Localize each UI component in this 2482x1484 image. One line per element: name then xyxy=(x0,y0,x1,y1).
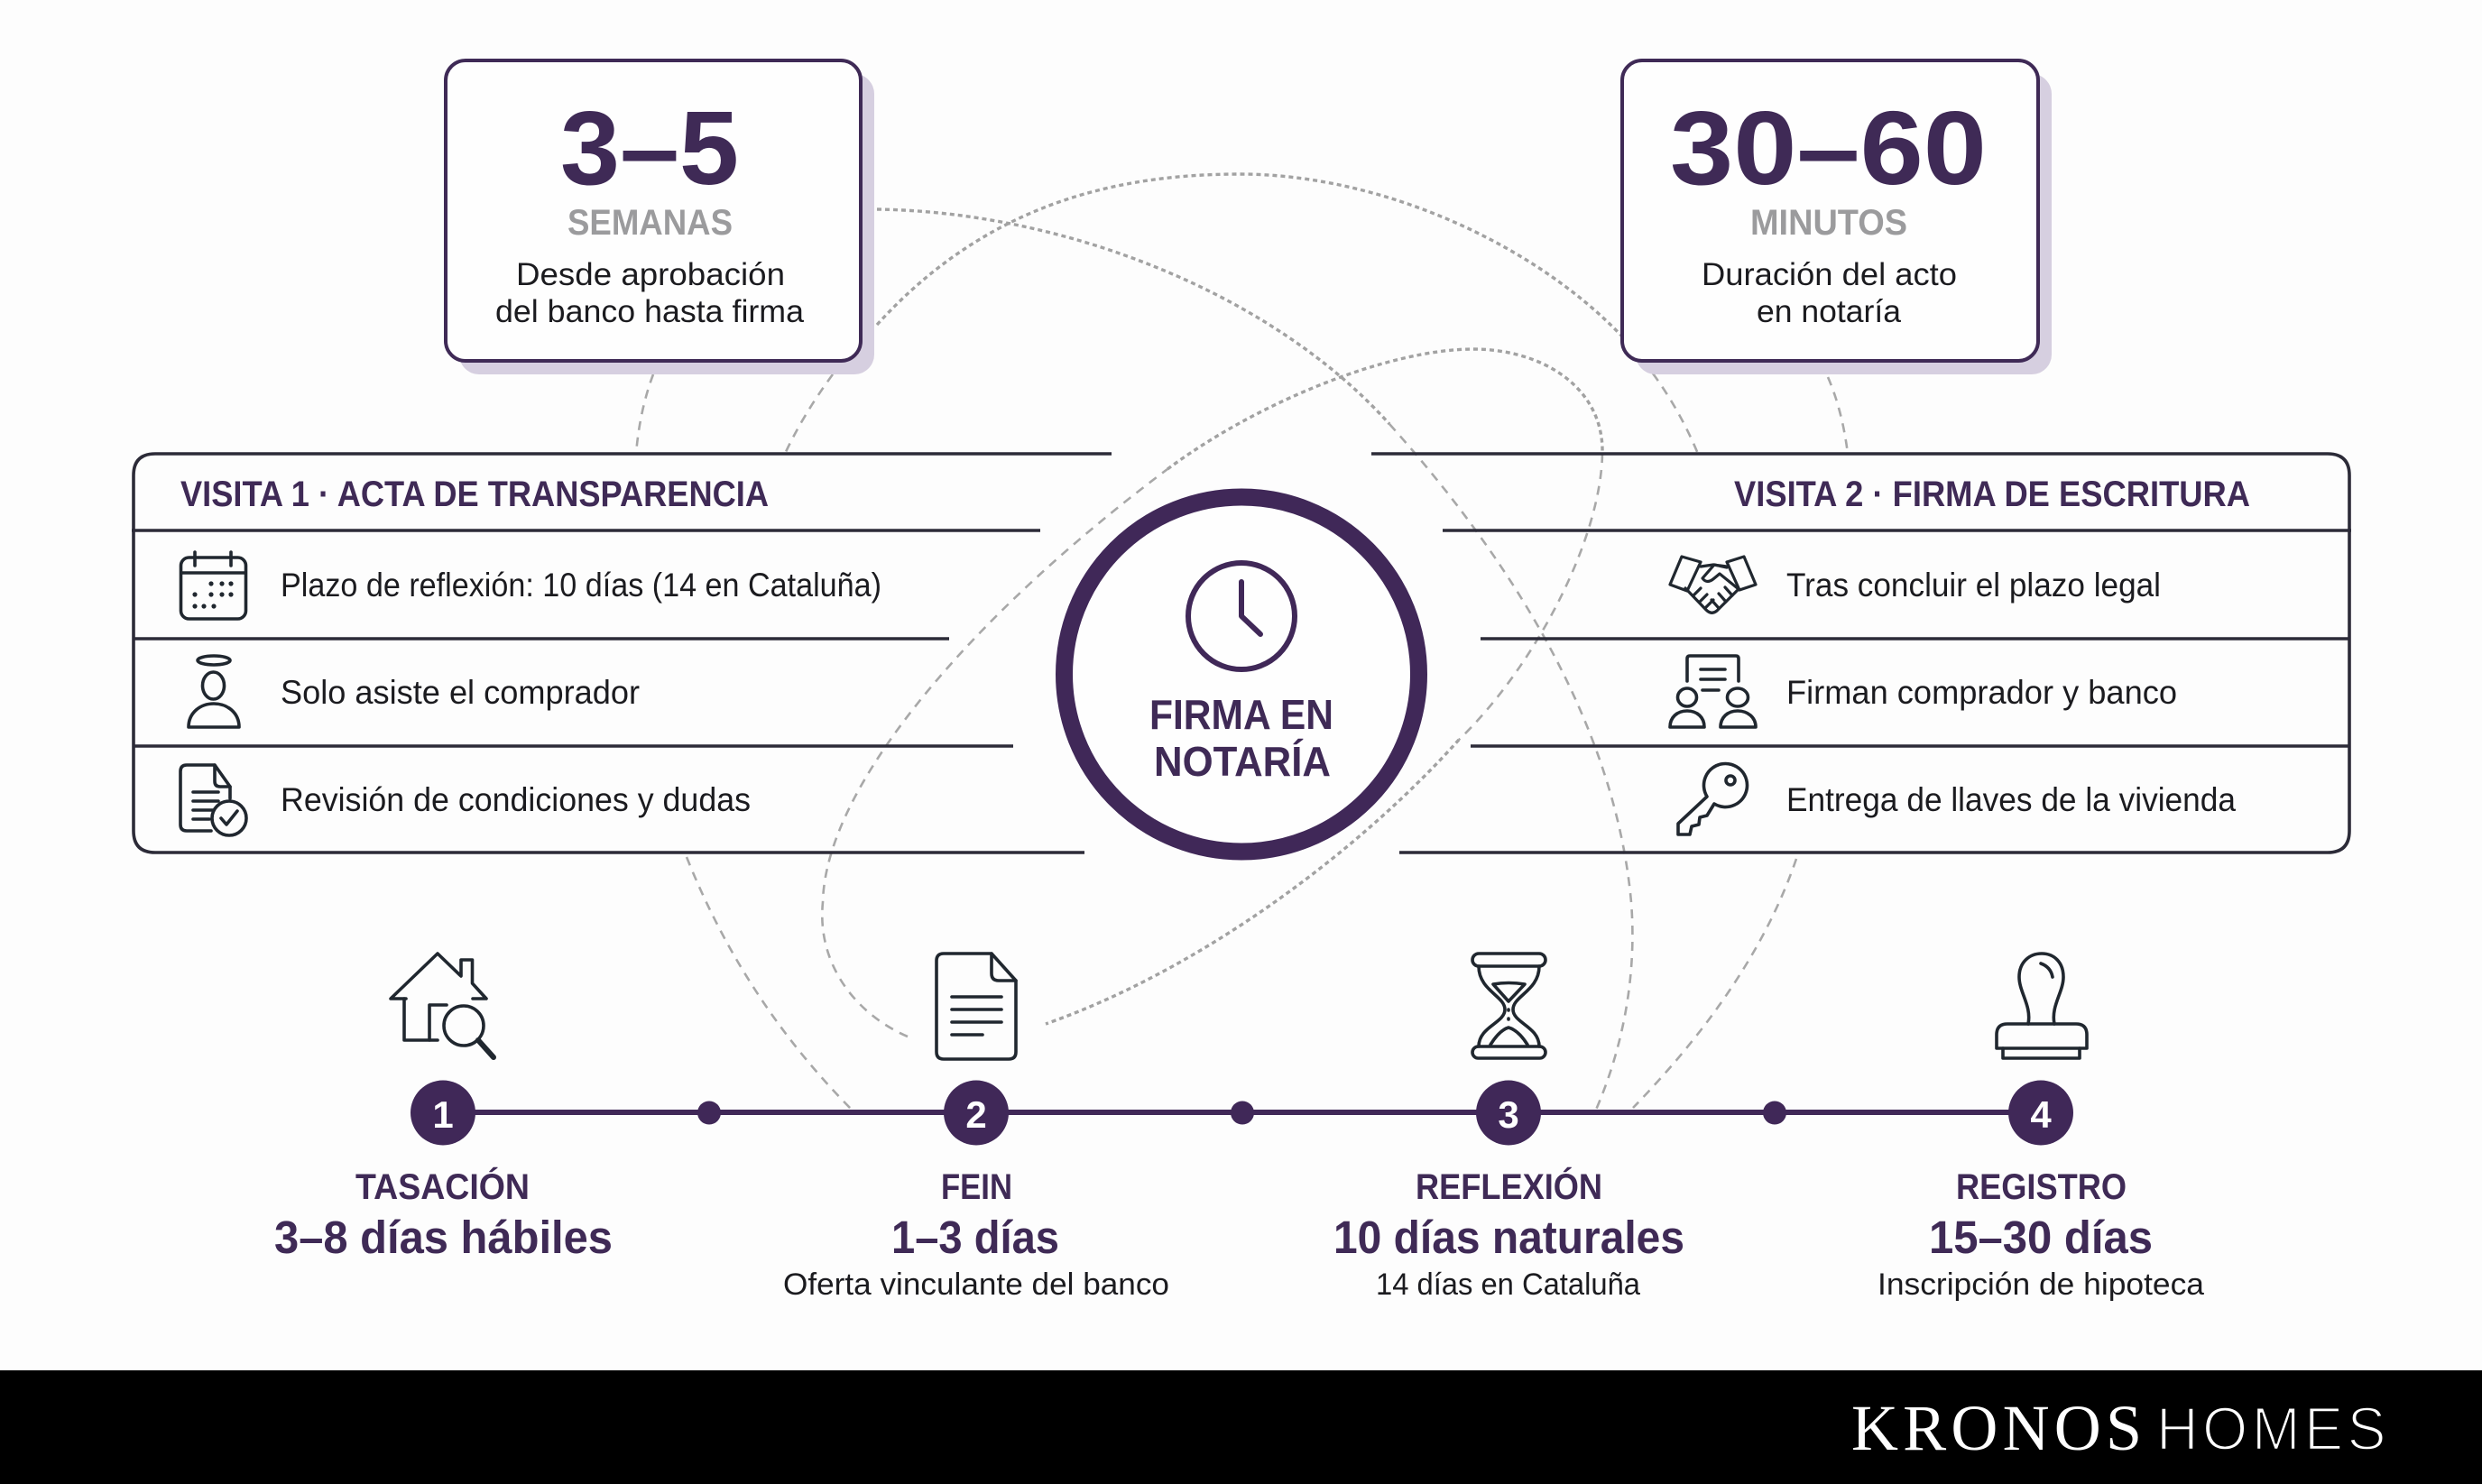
icon: handshake xyxy=(1670,557,1756,613)
big number 3–5: 3–5 xyxy=(560,89,739,207)
step duration: 10 días naturales xyxy=(1333,1212,1684,1263)
stat card: 3–5 semanas xyxy=(446,60,874,374)
icon: house with magnifier xyxy=(391,954,494,1057)
step duration: 15–30 días xyxy=(1929,1212,2153,1263)
unit label: SEMANAS xyxy=(567,203,733,243)
step 2: fein: 2 xyxy=(965,1093,987,1136)
step 4: registro: 4 xyxy=(2030,1093,2052,1136)
card description: Desde aprobación xyxy=(516,257,785,292)
row text: plazo de reflexión: Plazo de reflexión: 10 días (14 en Cataluña) xyxy=(281,567,881,604)
icon: document with check xyxy=(180,765,246,835)
step duration: 3–8 días hábiles xyxy=(274,1212,613,1263)
icon: signers with document xyxy=(1670,656,1756,727)
step label: FEIN xyxy=(941,1167,1012,1207)
footer bar xyxy=(0,1370,2482,1484)
icon: document xyxy=(937,954,1016,1059)
badge title xyxy=(1149,691,1333,785)
icon: hourglass xyxy=(1472,954,1545,1058)
card description: Duración del acto xyxy=(1702,257,1957,292)
logo: kronoshomes: KRONOS xyxy=(1851,1392,2142,1464)
timeline xyxy=(274,954,2204,1302)
panel: visita 2 xyxy=(1371,454,2351,853)
step 2: fein xyxy=(783,954,1169,1302)
big number 30–60: 30–60 xyxy=(1670,89,1987,207)
logo: kronoshomes xyxy=(1851,1392,2386,1464)
icon: key xyxy=(1678,764,1747,834)
step 1: tasación xyxy=(274,954,613,1263)
row text: tras concluir: Tras concluir el plazo legal xyxy=(1786,567,2161,604)
step 3: reflexión xyxy=(1333,954,1684,1302)
step duration: 1–3 días xyxy=(891,1212,1059,1263)
central badge: firma en notaría xyxy=(1065,497,1418,852)
logo: kronoshomes: HOMES xyxy=(2156,1396,2386,1463)
step label: REFLEXIÓN xyxy=(1416,1166,1602,1207)
icon: clock xyxy=(1188,563,1295,669)
row text: revisión: Revisión de condiciones y dudas xyxy=(281,781,751,818)
step label: REGISTRO xyxy=(1956,1167,2127,1207)
step note: 14 días en Cataluña xyxy=(1376,1267,1640,1302)
heading: visita 1: VISITA 1 · ACTA DE TRANSPARENCIA xyxy=(180,475,769,514)
panel: visita 1 xyxy=(132,454,1112,853)
step note: Inscripción de hipoteca xyxy=(1878,1267,2204,1302)
card description: en notaría xyxy=(1757,294,1902,329)
badge title: NOTARÍA xyxy=(1154,738,1331,785)
icon: person xyxy=(189,656,239,727)
step 4: registro xyxy=(1878,954,2204,1302)
step note: Oferta vinculante del banco xyxy=(783,1267,1169,1302)
badge title: FIRMA EN xyxy=(1149,691,1333,738)
stat card: 30–60 minutos xyxy=(1622,60,2052,374)
row text: firman: Firman comprador y banco xyxy=(1786,674,2177,711)
step 3: reflexión: 3 xyxy=(1498,1093,1519,1136)
step 1: tasación: 1 xyxy=(432,1093,454,1136)
unit label: MINUTOS xyxy=(1750,203,1907,243)
dashed orbit lines xyxy=(636,174,1848,1110)
heading: visita 2: VISITA 2 · FIRMA DE ESCRITURA xyxy=(1734,475,2250,514)
icon: calendar xyxy=(180,552,245,619)
step label: TASACIÓN xyxy=(355,1166,530,1207)
card description xyxy=(1702,257,1957,329)
icon: stamp xyxy=(1997,954,2087,1058)
card description: del banco hasta firma xyxy=(495,294,805,329)
row text: entrega: Entrega de llaves de la vivienda xyxy=(1786,781,2236,818)
row text: solo asiste: Solo asiste el comprador xyxy=(281,674,640,711)
card description xyxy=(495,257,805,329)
